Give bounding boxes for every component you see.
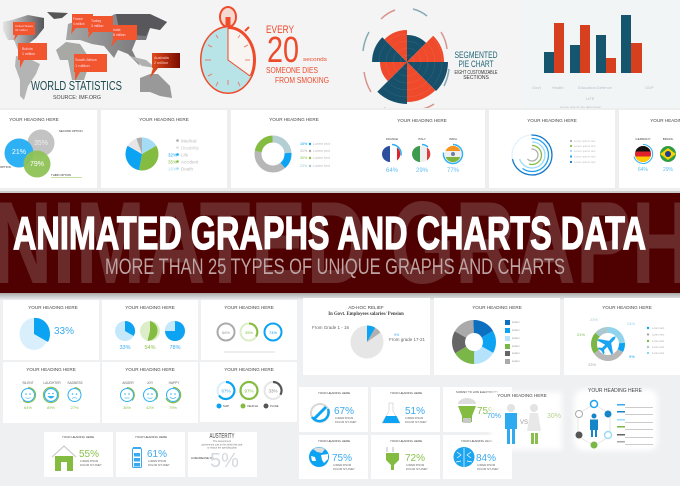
legend: Lorem text [652,332,665,336]
face: anger: 36% [123,405,131,410]
caption [335,416,357,424]
caption [477,463,499,471]
callout: Australia [150,53,180,78]
face: happy: 79% [169,405,177,410]
legend: Lorem text [313,142,330,146]
heading: YOUR HEADING HERE [497,393,547,398]
legend: 16% [300,142,308,146]
icon: stopwatch [201,7,254,92]
legend: 31% [300,149,308,153]
legend: Lorem [512,351,519,355]
callout: Turkey: 3 million [91,24,104,28]
heading: YOUR HEADING HERE [390,391,422,395]
face: silent: SILENT [22,381,34,385]
legend: Lorem text [313,164,330,168]
caption line [224,351,275,353]
heading: YOUR HEADING HERE [269,117,319,122]
pie title: EIGHT CUSTOMIZABLE [454,70,498,76]
legend: Lorem text [652,326,665,330]
legend: Lorem text [652,351,665,355]
caption: DOLOR SIT AMET [406,467,428,471]
callout: France: 4 million [73,22,85,26]
callout: South Africa [74,54,107,81]
legend [647,326,665,355]
body: The Government [213,440,231,443]
legend: Death [181,166,194,172]
bar chart [544,15,642,73]
ring captions: VEHICLE [247,404,258,408]
face: anger: ANGER [122,381,134,385]
pie outer labels [363,9,449,110]
legend [570,139,596,164]
venn circles: 35% [34,140,48,147]
panel: hexagon person [574,388,658,451]
row 2 panels backdrop [0,108,680,193]
heading: YOUR HEADING HERE [397,118,447,123]
stopwatch text: FROM SMOKING [275,76,329,85]
panel: donut legend [231,110,358,188]
icon: brain [454,447,474,467]
callout: United States: 33 million [15,28,28,32]
panel: globe 75% [299,435,368,479]
value: 72% [405,453,425,464]
panel: brain 84% [443,435,512,479]
heading: YOUR HEADING HERE [224,305,274,310]
flag: Brazil: 29% [663,167,674,173]
chart axis labels: GDP [645,85,654,90]
value: 5% [210,450,239,472]
segmented pie chart panel [363,9,498,110]
icon: bulb [458,398,476,423]
legend: Lorem [512,344,519,348]
legend: Lorem [512,320,519,324]
panel: flags partial [619,110,680,188]
flag: Italy: 29% [416,168,429,174]
venn option labels: OPTION [0,165,11,169]
lower section shade [0,293,680,300]
legend: Lorem ipsum text [574,149,596,153]
face: silent [22,381,36,410]
value: 70%: 70% [487,413,501,420]
caption: LOREM IPSUM [148,459,166,463]
icon: woman [527,404,541,444]
legend: Lorem ipsum text [574,139,596,143]
venn circles: 21% [12,149,26,156]
panel: three rings [201,300,297,360]
panel: three pies [102,300,198,360]
value: 51% [405,406,425,417]
caption [333,463,355,471]
chart axis labels: Education Defence [578,85,613,90]
callout: South Africa: 1 million [75,63,90,68]
legend: Lorem ipsum text [574,144,596,148]
panel: pie chart legend [101,110,227,188]
callout: Bolivia: 1 million [22,52,35,56]
pie title [454,50,498,81]
icon: no sign [311,404,329,422]
panel: icon wheel [434,298,560,375]
callout: Bolivia [18,43,47,68]
legend: Lorem ipsum text [574,154,596,158]
hexagon frame [578,404,610,446]
pie title: SEGMENTED [454,50,498,60]
chart axis labels: Health [552,85,564,90]
legend: Lorem text [313,156,330,160]
legend: Lorem [512,336,519,340]
pie: 78%: 78% [169,345,181,351]
decrease label: A DECREASE OF [191,456,214,460]
face: anger [120,381,134,410]
segmented pie chart [372,27,448,104]
flag: Germany [634,137,653,173]
world statistics map panel [3,12,180,101]
face: joy: JOY [147,381,154,385]
legend: 35% [168,160,177,164]
pie: 54%: 54% [144,345,156,351]
legend: Life [181,152,189,158]
flag: Italy [412,137,430,174]
value: 30%: 30% [547,413,561,420]
panel: concentric rings [489,110,615,188]
face: laughter: LAUGHTER [43,381,61,385]
heading: YOUR HEADING HERE [9,117,59,122]
callout: India [111,25,137,47]
heading: YOUR HEADING HERE [139,117,189,122]
flag: France: 64% [386,168,399,174]
legend: Lorem [512,359,519,363]
panel: house 55% [44,432,113,477]
top strip background [0,0,680,110]
heading: YOUR HEADING HERE [588,388,643,394]
ring: 33% grey: 33% [268,388,278,394]
face: sadness: SADNESS [67,381,83,385]
pie title: PIE CHART [458,59,494,69]
ring: blue: 74% [269,330,277,335]
chart axis labels: Gov't [532,85,542,90]
caption: DOLOR SIT AMET [335,420,357,424]
pie: 33%: 33% [119,345,131,351]
legend: Lorem text [313,149,330,153]
stopwatch text: seconds [303,57,327,63]
value: 75% [477,406,497,417]
panel: plane donut [564,298,680,375]
stopwatch text: 20 [267,29,299,70]
percent labels: 9% [629,354,635,359]
flag: India: 77% [447,168,460,174]
legend: Lorem ipsum text [574,160,596,164]
heading: YOUR HEADING HERE [135,435,167,439]
hex nodes [576,400,612,448]
percent labels: 23% [590,317,598,322]
heading: YOUR HEADING HERE [390,439,422,443]
panel: single pie 33% [3,300,99,360]
venn option labels: THIRD OPTION [51,173,71,177]
caption: LOREM IPSUM [406,463,424,467]
heading: YOUR HEADING HERE [318,391,350,395]
face: laughter: 89% [47,405,55,410]
heading: AUSTERITY [210,433,235,440]
legend: Medical [181,138,197,144]
callout: France [71,14,93,34]
legend [300,142,330,168]
ring captions [216,404,279,408]
pie chart [126,138,158,170]
face: joy: 42% [146,405,154,410]
ring: 67% blue: 67% [221,388,231,394]
heading: YOUR HEADING HERE [26,367,76,372]
face: silent: 64% [24,405,32,410]
icon: battery [132,447,142,468]
caption [406,463,428,471]
callout: Turkey [88,16,113,38]
percent labels: 24% [627,321,635,326]
legend: 30% [300,156,308,160]
caption: DOLOR SIT AMET [405,420,427,424]
heading: YOUR HEADING HERE [125,367,175,372]
panel: progress rings [200,362,297,422]
body: to reduce the spending plan [207,446,237,450]
flag: Brazil: BRAZIL [663,137,674,141]
caption: LOREM IPSUM [80,459,98,463]
flag: Italy: ITALY [418,137,426,141]
icon: plug [386,447,399,470]
donut chart [258,139,288,169]
legend: Lorem text [652,345,665,349]
percent labels [577,317,635,367]
heading: YOUR HEADING HERE [28,305,78,310]
venn option labels: SECOND OPTION [59,129,82,133]
label: grade 17-21: From grade 17-21 [389,337,426,342]
stopwatch text: SOMEONE DIES [266,66,318,75]
heading: YOUR HEADING HERE [318,439,350,443]
venn circles: 79% [30,161,44,168]
legend: 23% [300,164,308,168]
heading: YOUR HEADING HERE [224,367,274,372]
flag: France [382,137,401,174]
legend: Lorem text [652,339,665,343]
legend: Accident [181,160,199,164]
caption: DOLOR SIT AMET [148,463,170,467]
caption: DOLOR SIT AMET [333,467,355,471]
heading: YOUR HEADING HERE [62,435,94,439]
title banner [0,177,680,308]
value: 55% [79,449,99,460]
heading: YOUR HEADING HERE [602,305,652,310]
panel: country flags [358,110,485,188]
ring captions: SHIP [223,404,229,408]
caption [405,416,427,424]
body [202,440,243,450]
callout: United States [13,22,35,41]
value: 33% [54,326,74,337]
panel: bulb 75% [443,387,512,432]
heading: YOUR HEADING HERE [472,305,522,310]
map source: SOURCE: IMF.ORG [53,95,101,101]
face: laughter [43,381,61,410]
value: 67% [334,406,354,417]
callout: India: 8 million [113,33,126,37]
flag: India: INDIA [449,137,457,141]
caption: DOLOR SIT AMET [477,467,499,471]
legend: 16% [168,166,177,172]
panel: faces two [102,362,198,423]
face: sadness [67,381,83,410]
face: happy [166,381,181,410]
chart axis labels [532,85,654,109]
pie [350,325,384,358]
panel: venn options [0,110,97,188]
radial ring chart [512,135,552,175]
heading: YOUR HEADING HERE [125,305,175,310]
stopwatch panel [201,7,329,92]
caption: DOLOR SIT AMET [80,463,102,467]
chart axis labels: LIFE [586,96,595,101]
legend: 32% [168,152,177,158]
label: grade 17-21 [389,333,426,342]
ring: 97% green: 97% [244,388,254,394]
world map landmasses [3,12,172,100]
segmented donut [458,326,490,358]
callout: South Africa: South Africa [75,57,97,62]
callout: United States: United States [15,24,34,28]
panel: no-sign 67% [299,387,368,432]
percent labels: 33% [588,362,596,367]
vs label: VS [520,420,528,426]
callout: Bolivia: Bolivia [22,47,33,51]
caption [80,459,102,467]
icon: flask [382,403,400,423]
caption: LOREM IPSUM [405,416,423,420]
heading: YOUR HEADING HERE [461,439,493,443]
bar chart panel [523,0,680,110]
icon: globe [309,447,329,467]
flag: Brazil [660,137,676,173]
legend [505,320,519,364]
callout: Australia: Australia [154,56,170,60]
ring captions: PLANE [270,404,279,408]
panel: ad-hoc relief [303,298,430,375]
icon: man [505,404,517,444]
panel: vs comparison [487,392,562,450]
face: sadness: 27% [70,405,79,410]
side list [617,404,653,445]
pie title: SECTIONS [463,75,489,81]
stopwatch text [266,24,329,85]
heading: YOUR HEADING HERE [527,118,577,123]
panel: faces one [3,362,100,423]
caption: LOREM IPSUM [333,463,351,467]
pie [20,318,50,350]
panel: battery 61% [116,432,185,477]
panel: flask 51% [371,387,440,432]
callout: Australia: 2 million [154,61,168,65]
map title: WORLD STATISTICS [31,78,122,93]
icon: person [590,414,598,437]
donut [594,330,622,358]
legend: Lorem [512,328,519,332]
stopwatch text: EVERY [266,24,294,36]
value: 84% [476,453,496,464]
face: happy: HAPPY [169,381,180,385]
panel: austerity [188,432,257,477]
flag: India [443,137,462,174]
value: 75% [332,453,352,464]
label: grade 1-16: From Grade 1 - 16 [312,325,350,330]
panel: plug 72% [371,435,440,479]
venn circles [4,130,54,178]
caption [148,459,170,467]
callout: Turkey: Turkey [91,19,102,23]
venn option labels [0,129,82,178]
flag: Germany: GERMANY [635,137,651,141]
heading: AD-HOC RELIEF [348,305,384,310]
body: government cuts to the deficit this year [202,444,243,446]
ring: grey: 66% [222,330,230,335]
callout: India: India [113,28,120,32]
callout: France: France [73,17,83,21]
legend: Disability [181,146,200,150]
flag: Germany: 64% [638,167,649,173]
face: joy [144,381,158,410]
heading: SURVEY TO LOW ELECTRICITY [456,390,498,394]
flag: France: FRANCE [386,137,398,141]
icon: house [52,446,76,471]
icon: plane [594,329,623,358]
value: 61% [147,449,167,460]
label: grade 17-21: 9% [394,333,399,337]
legend [168,138,200,172]
subheading: In Govt. Employees salaries/ Pension [328,312,404,317]
chart axis labels: source note for the data shown [560,105,602,109]
caption: LOREM IPSUM [335,416,353,420]
ring: green: 35% [245,330,253,335]
caption: LOREM IPSUM [477,463,495,467]
percent labels: 21% [577,332,585,337]
